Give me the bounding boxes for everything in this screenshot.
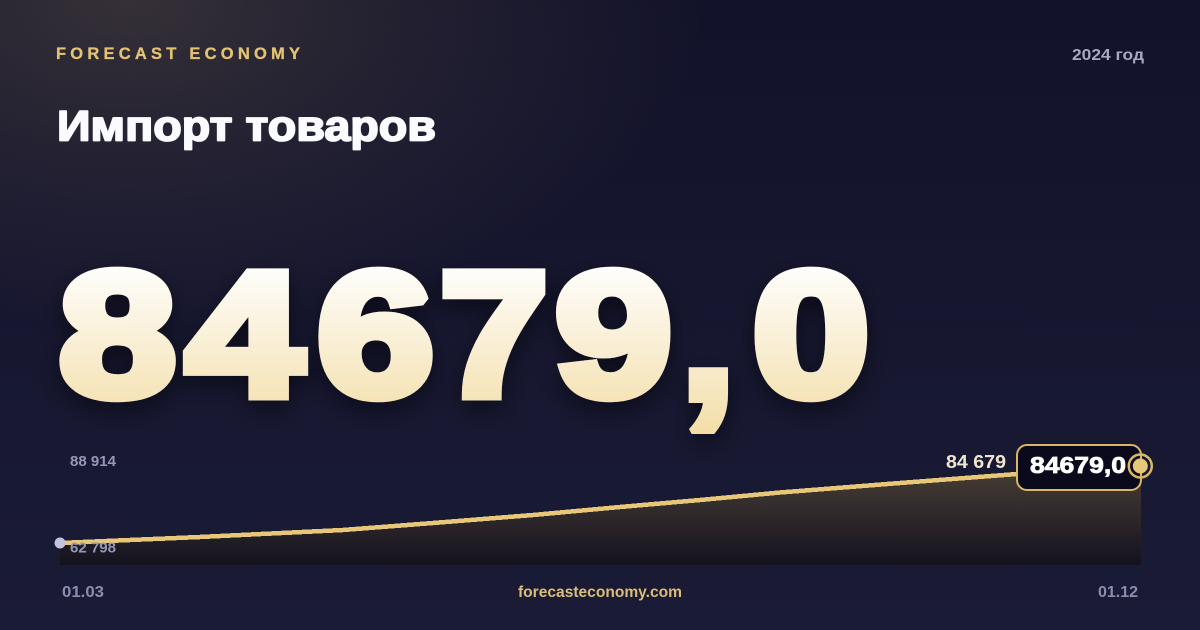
last value label: 84 679 — [946, 452, 1006, 472]
big number: 7 — [440, 237, 548, 433]
start date: 01.03 — [62, 584, 104, 601]
start point — [54, 538, 66, 548]
big number: 8 — [59, 236, 176, 432]
end date: 01.12 — [1098, 584, 1138, 601]
big number: 0 — [753, 236, 869, 432]
title: Импорт товаров — [57, 102, 436, 150]
brand label: FORECAST ECONOMY — [56, 45, 300, 63]
big number — [59, 219, 869, 443]
year label: 2024 год — [1072, 47, 1144, 64]
end point marker — [1129, 454, 1152, 478]
big number: 6 — [317, 236, 434, 432]
big number: 4 — [186, 236, 303, 432]
value callout — [1017, 445, 1141, 490]
area fill — [60, 472, 1141, 565]
big number: 9 — [555, 236, 672, 432]
site url: forecasteconomy.com — [518, 584, 682, 601]
axis max label: 88 914 — [70, 453, 117, 470]
big number: , — [676, 219, 740, 443]
trend line — [60, 474, 1017, 543]
axis min label: 62 798 — [70, 540, 116, 556]
area chart — [54, 472, 1141, 565]
value callout: 84679,0 — [1030, 452, 1126, 478]
